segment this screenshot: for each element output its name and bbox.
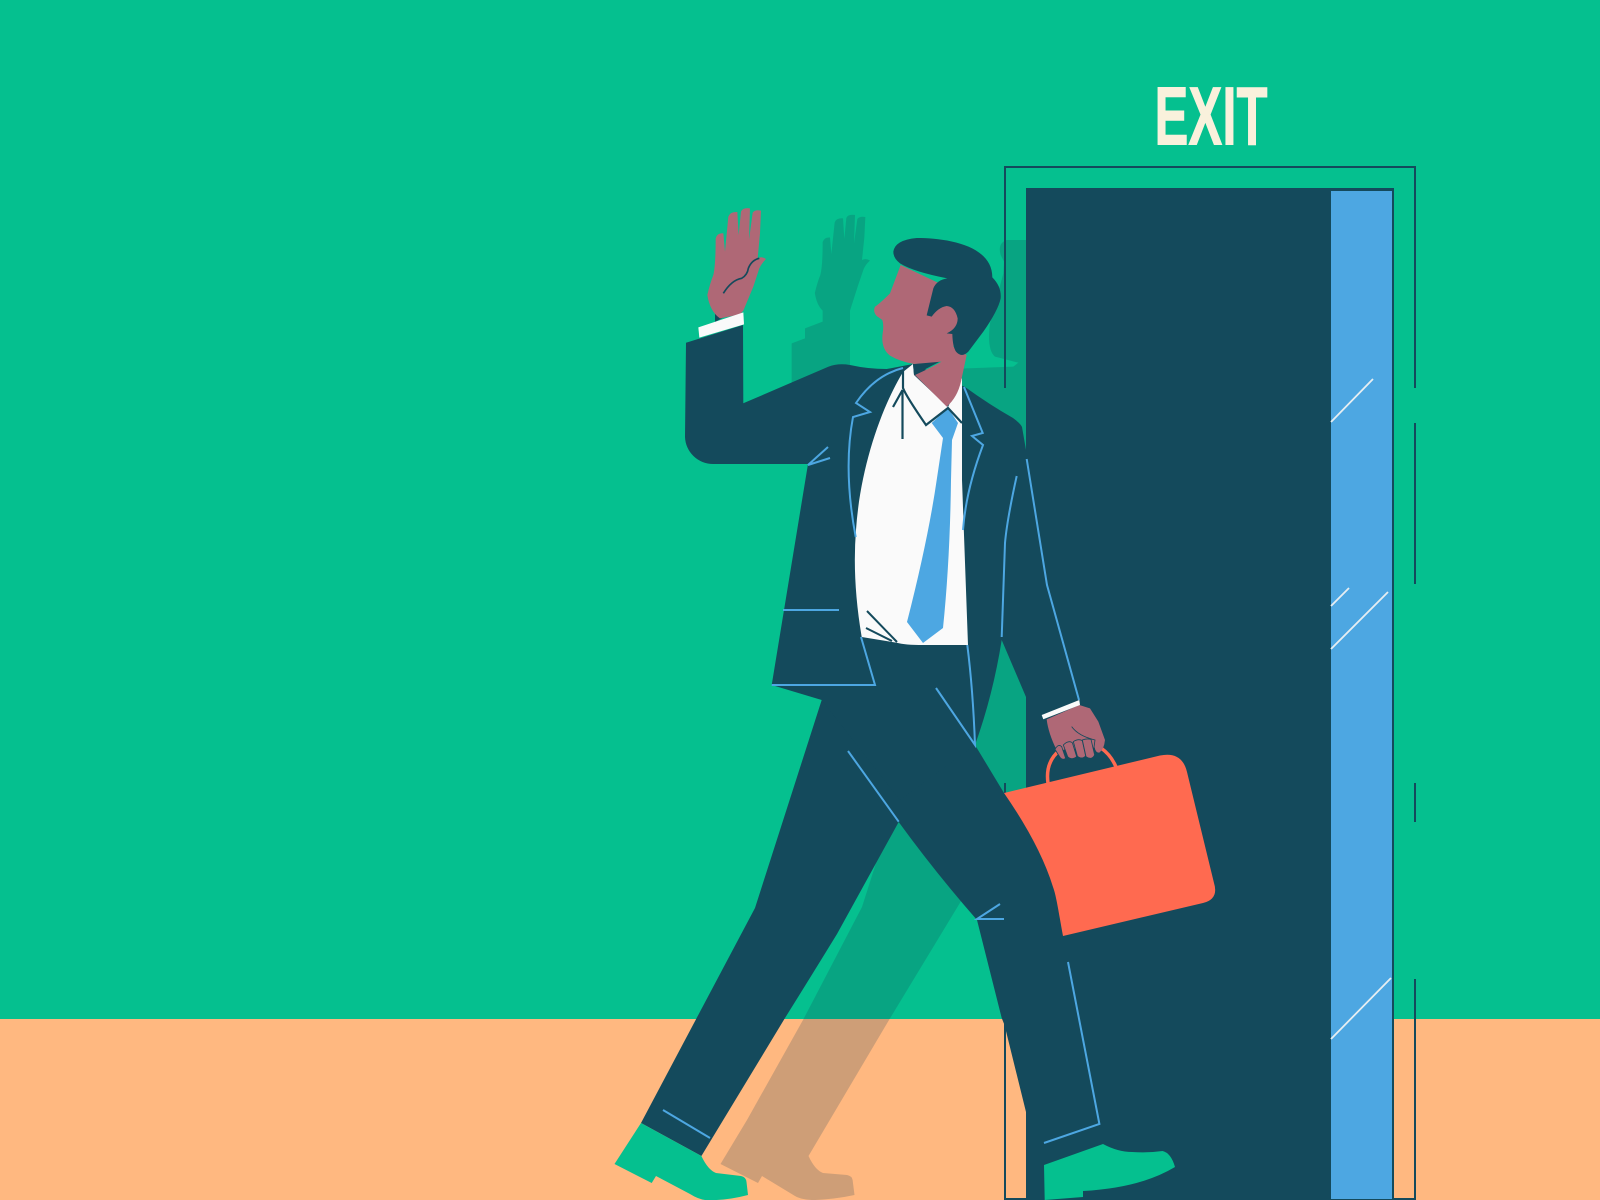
hair bbox=[893, 238, 1001, 355]
briefcase body bbox=[1000, 755, 1215, 936]
shadow: raised hand and sleeve bbox=[792, 215, 870, 397]
exit sign: EXIT bbox=[1154, 70, 1268, 163]
collar lines bbox=[893, 368, 962, 439]
head bbox=[874, 238, 1001, 407]
open door panel with glass bbox=[1331, 188, 1394, 1200]
door frame outline bbox=[1005, 167, 1415, 1199]
front leg bbox=[899, 700, 1063, 1200]
shirt pocket folds bbox=[866, 611, 897, 642]
cast shadow of the man bbox=[720, 215, 1030, 1200]
palm and fingers bbox=[707, 208, 766, 318]
front shoe bbox=[1044, 1144, 1175, 1200]
jacket seams bbox=[663, 368, 1099, 1143]
wrist cuff bbox=[1042, 700, 1080, 719]
floor bbox=[0, 1019, 1600, 1200]
tie bbox=[907, 408, 958, 643]
door opening bbox=[1026, 188, 1332, 1200]
jacket and raised arm bbox=[685, 325, 1026, 800]
shirt cuff bbox=[698, 312, 744, 338]
briefcase handle bbox=[1048, 742, 1116, 783]
face and neck bbox=[874, 265, 967, 407]
fingers bbox=[1055, 739, 1095, 759]
thumb crease bbox=[1072, 727, 1095, 747]
raised hand bbox=[698, 208, 766, 338]
back leg bbox=[641, 690, 975, 1156]
back of hand bbox=[1047, 705, 1105, 753]
shadow: head and torso bbox=[953, 240, 1030, 800]
briefcase bbox=[1000, 742, 1215, 936]
palm crease bbox=[723, 258, 759, 293]
shadow: leg and shoe bbox=[720, 820, 962, 1200]
wrist bbox=[715, 311, 725, 322]
gripping hand bbox=[1047, 705, 1105, 759]
man bbox=[614, 208, 1175, 1200]
neck shadow wedge bbox=[913, 361, 941, 375]
back shoe bbox=[614, 1123, 748, 1200]
shirt bbox=[855, 364, 968, 645]
